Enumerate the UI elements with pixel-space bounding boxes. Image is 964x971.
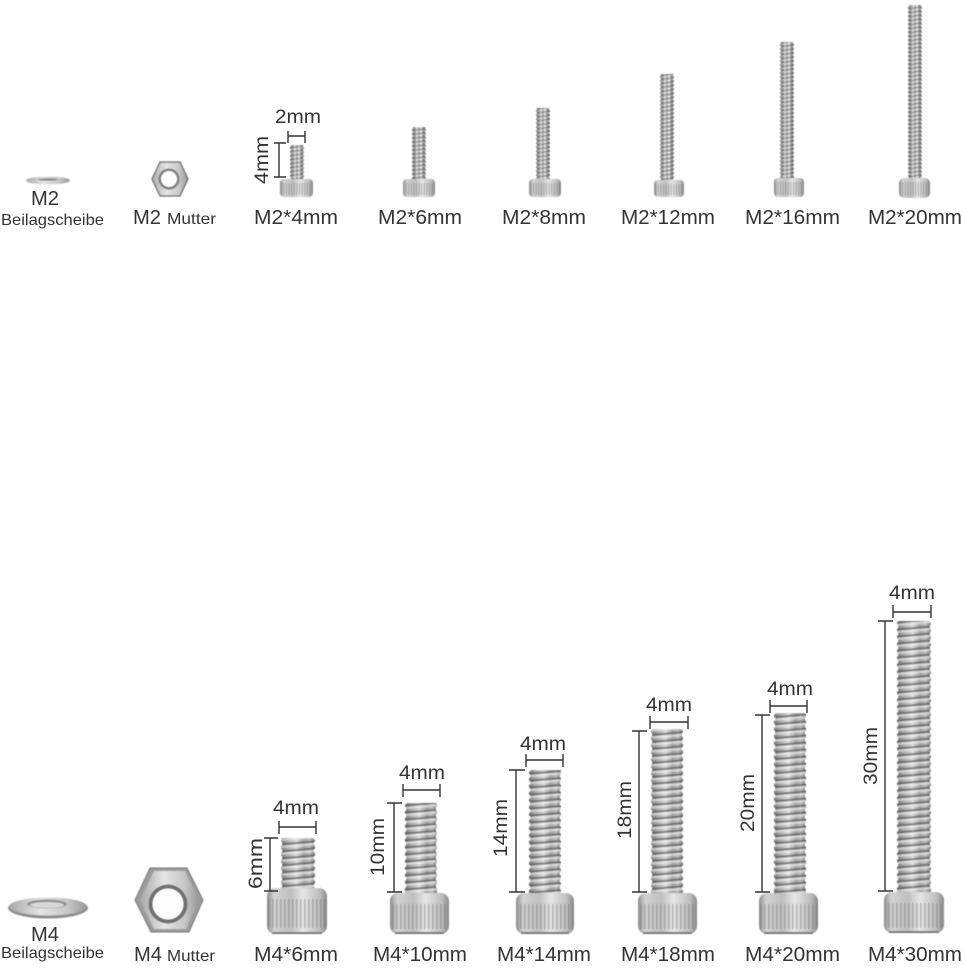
label: M4 nut bbox=[134, 944, 216, 966]
labels: M4 bolts bbox=[254, 944, 962, 966]
dimension: M4*6mm: 4mm bbox=[273, 798, 319, 819]
dimension: M4*20mm: 4mm bbox=[767, 679, 813, 700]
dimension: M4*30mm bbox=[861, 583, 935, 891]
dimension: M4*20mm bbox=[738, 679, 813, 892]
bolt: M4*6mm bbox=[267, 838, 327, 934]
labels: M2 bolts: M2*6mm bbox=[378, 207, 462, 229]
dimension: M4*14mm bbox=[491, 734, 566, 892]
icon: M2 washer bbox=[26, 176, 70, 184]
labels: M2 bolts: M2*12mm bbox=[621, 207, 715, 229]
label: M4 nut: M4 bbox=[134, 944, 162, 966]
dimension: M2*4mm diameter: 2mm bbox=[275, 107, 321, 128]
label: M2 nut bbox=[133, 207, 217, 229]
label: M4 nut: Mutter bbox=[167, 948, 216, 965]
dimension: M2*4mm length bbox=[252, 136, 286, 184]
bolt: M2*20mm bbox=[899, 5, 930, 198]
dimension: M4*10mm: 4mm bbox=[399, 763, 445, 784]
bolt: M2*12mm bbox=[654, 74, 684, 197]
label: M2 washer: Beilagscheibe bbox=[1, 212, 104, 229]
bolt: M4*30mm bbox=[884, 621, 944, 933]
labels: M4 bolts: M4*18mm bbox=[621, 944, 715, 966]
labels: M4 bolts: M4*14mm bbox=[497, 944, 591, 966]
dimension: M4*14mm: 4mm bbox=[520, 734, 566, 755]
labels: M4 bolts: M4*10mm bbox=[373, 944, 467, 966]
labels: M2 bolts: M2*20mm bbox=[868, 207, 962, 229]
icon: M4 washer bbox=[8, 898, 88, 918]
bolt: M2*8mm bbox=[529, 108, 561, 197]
bolt: M4*14mm bbox=[516, 770, 574, 934]
dimension: M4*14mm: 14mm bbox=[491, 799, 512, 857]
labels: M2 bolts bbox=[254, 207, 962, 229]
label: M2 nut: M2 bbox=[133, 207, 161, 229]
dimension: M4*18mm: 18mm bbox=[615, 781, 636, 839]
bolt: M4*18mm bbox=[638, 729, 697, 934]
dimension: M4*30mm: 4mm bbox=[889, 583, 935, 604]
bolt: M2*16mm bbox=[774, 42, 804, 197]
dimension: M4*18mm: 4mm bbox=[646, 695, 692, 716]
dimension: M4*30mm: 30mm bbox=[861, 727, 882, 785]
bolt: M2*4mm bbox=[280, 145, 313, 197]
labels: M2 bolts: M2*16mm bbox=[745, 207, 840, 229]
label: M4 washer: Beilagscheibe bbox=[1, 945, 104, 962]
dimension: M2*4mm diameter bbox=[275, 107, 321, 143]
label: M2 nut: Mutter bbox=[167, 211, 217, 228]
icon: M4 nut bbox=[135, 868, 203, 932]
labels: M2 bolts: M2*4mm bbox=[254, 207, 338, 229]
labels: M4 bolts: M4*6mm bbox=[254, 944, 338, 966]
label: M4 washer bbox=[1, 924, 104, 962]
dimension: M4*6mm bbox=[246, 798, 319, 891]
dimension: M4*18mm bbox=[615, 695, 692, 892]
bolt: M2*6mm bbox=[403, 127, 435, 197]
icon: M2 nut bbox=[152, 162, 188, 196]
bolt: M4*20mm bbox=[759, 713, 818, 934]
bolt: M4*10mm bbox=[390, 803, 449, 934]
dimension: M4*6mm: 6mm bbox=[246, 838, 267, 889]
dimension: M2*4mm length: 4mm bbox=[252, 136, 273, 184]
label: M4 washer: M4 bbox=[31, 924, 59, 946]
label: M2 washer: M2 bbox=[31, 188, 59, 210]
labels: M4 bolts: M4*20mm bbox=[745, 944, 840, 966]
dimension: M4*20mm: 20mm bbox=[738, 774, 759, 832]
labels: M4 bolts: M4*30mm bbox=[868, 944, 962, 966]
dimension: M4*10mm: 10mm bbox=[368, 818, 389, 876]
dimension: M4*10mm bbox=[368, 763, 445, 892]
label: M2 washer bbox=[1, 188, 104, 229]
labels: M2 bolts: M2*8mm bbox=[502, 207, 586, 229]
